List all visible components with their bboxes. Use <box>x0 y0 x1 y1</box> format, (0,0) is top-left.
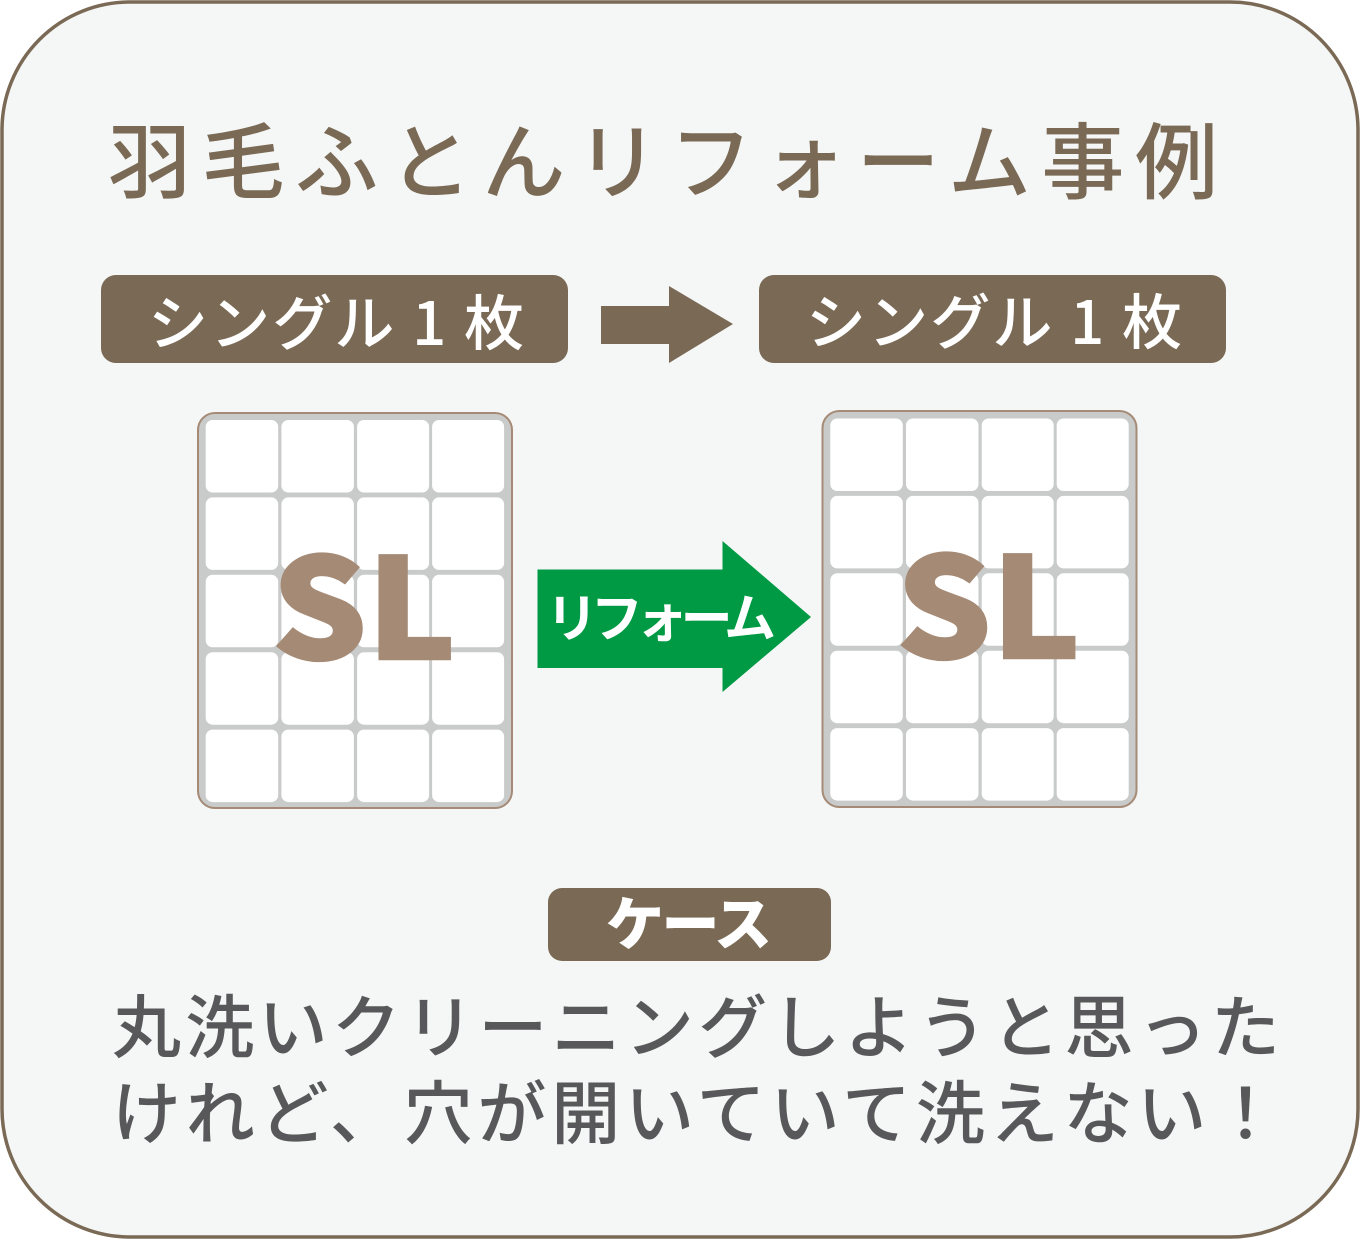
case description text: 丸洗いクリーニングしようと思った <box>112 972 1280 1072</box>
label: case <box>548 878 831 962</box>
size label: after: SL <box>896 498 1080 699</box>
diagram: after quilt <box>822 411 1136 807</box>
arrow: brown top arrow <box>601 286 733 363</box>
title: 羽毛ふとんリフォーム事例 <box>108 96 1218 216</box>
arrow: green reform arrow <box>538 541 811 692</box>
label: before quantity: シングル 1 枚 <box>148 276 524 363</box>
diagram: before quilt <box>198 413 512 808</box>
case description text: けれど、穴が開いていて洗えない！ <box>112 1058 1280 1158</box>
arrow: green reform arrow: リフォーム <box>546 577 776 652</box>
case description text <box>112 972 1280 1158</box>
size label: before: SL <box>272 499 456 700</box>
label: case: ケース <box>606 878 772 962</box>
label: after quantity: シングル 1 枚 <box>806 275 1182 362</box>
